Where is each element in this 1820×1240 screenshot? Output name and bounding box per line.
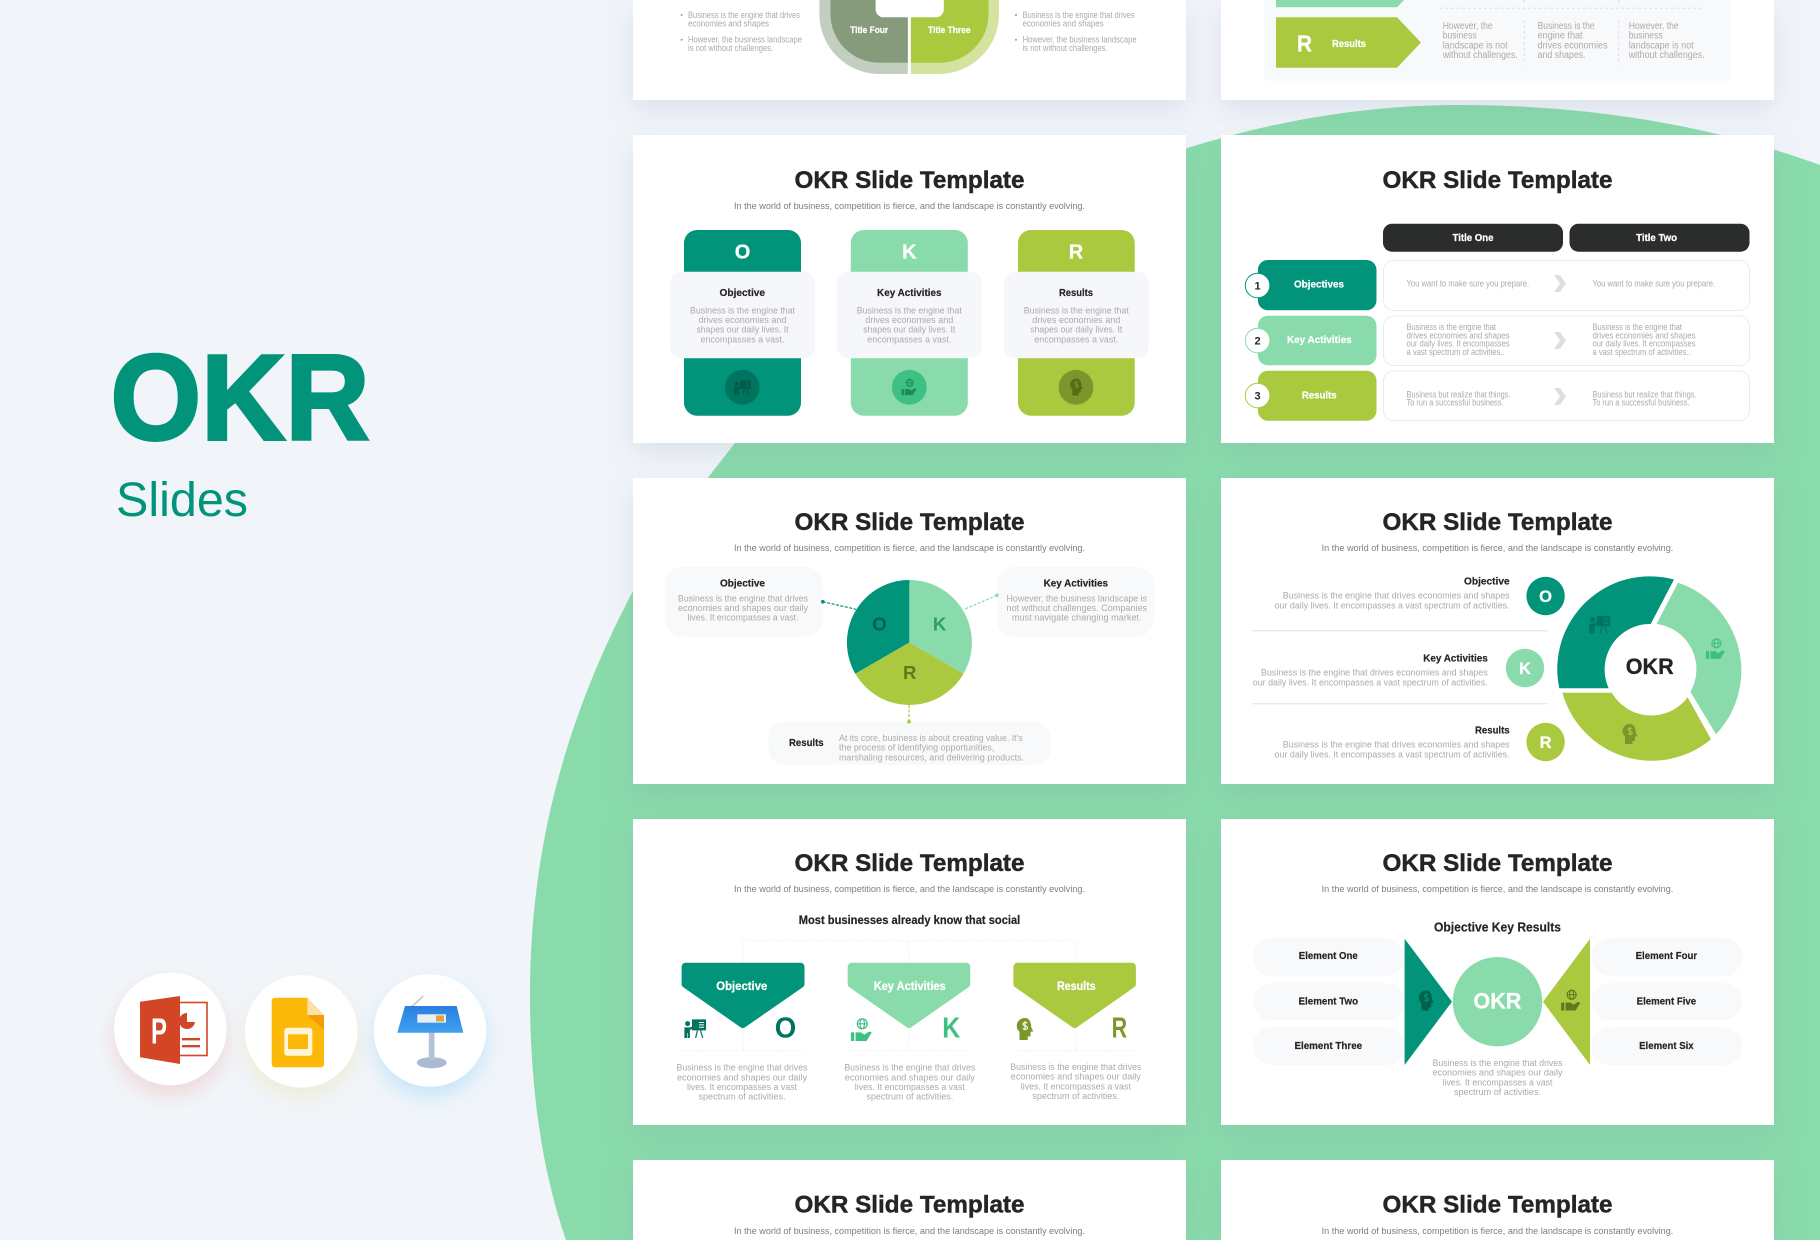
row 2: Key Activities: a vast spectrum of activities..	[1406, 347, 1504, 357]
left elements	[1253, 938, 1405, 1065]
column: Results: Results	[1059, 287, 1093, 299]
semicircular chart: Title Four	[850, 25, 888, 36]
row 2: Key Activities: our daily lives. It encompasses	[1406, 339, 1510, 349]
pie chart: O	[872, 614, 887, 635]
right triangle with icon	[1543, 939, 1590, 1065]
body bullets left: However, the business landscape	[688, 35, 802, 45]
column: Key Activities: K	[942, 1012, 960, 1044]
column: Objective: lives. It encompasses a vast	[687, 1082, 798, 1092]
body bullets right: is not without challenges.	[1023, 43, 1108, 53]
body text	[1432, 1058, 1563, 1097]
slide subtitle: In the world of business, competition is fierce, and the landscape is constantly evolving.	[734, 1226, 1085, 1237]
column: Objective: O	[775, 1012, 796, 1044]
column: Results: drives economies and	[1032, 315, 1120, 325]
callout: Results: Results	[789, 737, 824, 749]
slide title: OKR Slide Template	[794, 509, 1024, 536]
right elements: Element Four	[1636, 950, 1697, 962]
pie chart	[847, 580, 972, 705]
column: Results: encompasses a vast.	[1034, 334, 1118, 344]
column: Objective	[676, 967, 808, 1102]
item: Key Activities: our daily lives. It encompasses a vast spectrum of activities.	[1253, 677, 1488, 687]
row 1: Objectives: Objectives	[1294, 279, 1344, 291]
table header: Title Two: Title Two	[1636, 232, 1677, 244]
column: Key Activities	[844, 967, 976, 1102]
table header: Title One: Title One	[1452, 232, 1494, 244]
column: Key Activities: Key Activities	[874, 979, 946, 993]
body bullets right: Business is the engine that drives	[1023, 10, 1135, 20]
column: Objective: Objective	[716, 979, 768, 993]
row 1: Objectives: 1	[1255, 280, 1261, 292]
row 3: Results: Business but realize that things.	[1406, 389, 1510, 399]
column: Objective: spectrum of activities.	[698, 1092, 786, 1102]
slide subtitle: In the world of business, competition is fierce, and the landscape is constantly evolving.	[1322, 884, 1673, 895]
column: Key Activities: spectrum of activities.	[866, 1092, 953, 1102]
slide title: OKR Slide Template	[794, 850, 1024, 877]
icon: Google Slides	[245, 975, 358, 1088]
results table text	[1442, 21, 1705, 61]
column: Objective: encompasses a vast.	[700, 334, 784, 344]
results table text: However, the	[1629, 21, 1679, 32]
callout: Key Activities: not without challenges. Companies	[1007, 603, 1148, 613]
results table text: Business is the	[1538, 21, 1595, 32]
row 2: Key Activities: a vast spectrum of activities..	[1592, 347, 1690, 357]
item: Objective: our daily lives. It encompasses a vast spectrum of activities.	[1275, 600, 1510, 610]
panel: bottom-left partial slide	[633, 1160, 1186, 1240]
callout: Key Activities: must navigate changing market.	[1012, 613, 1142, 623]
results table text: without challenges.	[1442, 50, 1518, 61]
column: Key Activities: K	[902, 242, 917, 264]
slide title: OKR Slide Template	[1382, 850, 1612, 877]
row 2: Key Activities: Business is the engine that	[1406, 322, 1496, 332]
donut chart	[1557, 576, 1741, 761]
row 3: Results: Business but realize that things.	[1592, 389, 1696, 399]
slide title: OKR Slide Template	[794, 1192, 1024, 1218]
callout: Results: At its core, business is about creating value. It's	[839, 733, 1023, 743]
body bullets right: economies and shapes	[1023, 18, 1104, 28]
callout: Key Activities: Key Activities	[1044, 578, 1108, 590]
column: Results: Business is the engine that drives	[1010, 1062, 1142, 1072]
column: Objective: drives economies and	[698, 315, 787, 325]
row 2: Key Activities	[1245, 316, 1750, 366]
column: Objective	[670, 230, 815, 416]
body bullets right	[1015, 10, 1137, 53]
semicircular chart	[819, 0, 999, 74]
row 2: Key Activities: Business is the engine that	[1592, 322, 1682, 332]
row 1: Objectives	[1245, 260, 1750, 310]
left elements: Element Two	[1299, 995, 1358, 1007]
slide title: OKR Slide Template	[1382, 167, 1612, 194]
column: Key Activities: Key Activities	[877, 287, 942, 299]
column: Results	[1010, 967, 1142, 1101]
results table text: engine that	[1538, 31, 1583, 42]
column: Results: Results	[1057, 979, 1096, 993]
panel: slide with pentagons	[633, 819, 1186, 1125]
item: Objective: O	[1539, 588, 1552, 606]
column: Key Activities: Business is the engine that	[857, 305, 962, 315]
callout: Results: marshaling resources, and delivering products.	[839, 752, 1024, 762]
row 3: Results: To run a successful business.	[1406, 398, 1504, 408]
column: Objective: O	[735, 242, 750, 264]
item: Results: our daily lives. It encompasses a vast spectrum of activities.	[1275, 750, 1510, 760]
column: Key Activities: economies and shapes our daily	[845, 1072, 975, 1082]
body bullets left	[681, 10, 802, 53]
panel: bottom-right partial slide	[1221, 1160, 1774, 1240]
results table text: business	[1629, 31, 1663, 42]
slide title: OKR Slide Template	[1382, 1192, 1612, 1218]
column: Key Activities: lives. It encompasses a vast	[855, 1082, 965, 1092]
row 2: Key Activities: drives economies and shapes	[1592, 330, 1696, 340]
slide title: OKR Slide Template	[1382, 509, 1612, 536]
section heading: Most businesses already know that social	[799, 915, 1020, 927]
column: Results: R	[1069, 242, 1084, 264]
panel: top-right partial slide	[1221, 0, 1774, 100]
item: Objective	[1275, 576, 1565, 615]
results table text: landscape is not	[1443, 40, 1508, 51]
callout: Objective	[665, 567, 823, 637]
column: Key Activities: drives economies and	[865, 315, 953, 325]
column: Results: R	[1112, 1012, 1127, 1044]
row 1: Objectives: You want to make sure you prepare.	[1406, 279, 1529, 289]
arrow: results	[1276, 17, 1421, 68]
callout: Objective: lives. It encompasses a vast.	[688, 613, 798, 623]
item: Key Activities	[1253, 649, 1544, 687]
results table text: drives economies	[1538, 40, 1608, 51]
item: Results	[1275, 723, 1565, 761]
arrow: results: R	[1297, 31, 1312, 57]
subtitle: Slides: Slides	[116, 474, 248, 527]
row 2: Key Activities: 2	[1255, 336, 1261, 348]
slide subtitle: In the world of business, competition is fierce, and the landscape is constantly evolving.	[1322, 1226, 1673, 1237]
column: Objective: shapes our daily lives. It	[696, 325, 789, 335]
panel: top-left partial slide	[633, 0, 1186, 100]
column: Objective: Business is the engine that	[690, 305, 796, 315]
body text: economies and shapes our daily	[1432, 1068, 1563, 1078]
callout: Results: the process of identifying opportunities,	[839, 743, 994, 753]
body text: Business is the engine that drives	[1432, 1058, 1563, 1068]
column: Key Activities: Business is the engine that drives	[844, 1063, 976, 1073]
slide subtitle: In the world of business, competition is fierce, and the landscape is constantly evolving.	[734, 543, 1085, 554]
item: Objective: Objective	[1464, 576, 1510, 588]
pie chart: K	[933, 614, 947, 635]
results table text: business	[1443, 31, 1477, 42]
callout: Key Activities	[997, 567, 1154, 637]
icon: PowerPoint	[114, 973, 227, 1085]
left triangle with icon	[1405, 939, 1452, 1065]
icon: Keynote	[374, 974, 486, 1087]
item: Key Activities: Key Activities	[1423, 652, 1488, 664]
results table text: and shapes.	[1538, 50, 1586, 61]
row 2: Key Activities: drives economies and shapes	[1406, 330, 1510, 340]
column: Results: economies and shapes our daily	[1011, 1072, 1141, 1082]
results table text: without challenges.	[1628, 50, 1705, 61]
connector: Results	[907, 705, 911, 724]
item: Key Activities: K	[1519, 660, 1531, 678]
row 3: Results: 3	[1255, 390, 1261, 402]
row 2: Key Activities: our daily lives. It encompasses	[1592, 339, 1696, 349]
panel: slide with pie chart	[633, 478, 1186, 784]
column: Objective: Business is the engine that drives	[676, 1063, 808, 1073]
column: Results: lives. It encompasses a vast	[1021, 1081, 1131, 1091]
body bullets left: economies and shapes	[688, 18, 770, 28]
section heading: Objective Key Results	[1434, 920, 1561, 935]
body bullets left: is not without challenges.	[688, 43, 773, 53]
connector: Key Activities	[964, 594, 999, 609]
row 3: Results: Results	[1302, 389, 1337, 401]
panel: slide with OKR column cards	[633, 135, 1186, 443]
item: Results: Business is the engine that drives economies and shapes	[1283, 740, 1510, 750]
connector: Objective	[821, 600, 856, 609]
donut chart: OKR	[1626, 654, 1674, 679]
row 2: Key Activities: Key Activities	[1287, 334, 1352, 346]
column: Objective: economies and shapes our daily	[677, 1072, 808, 1082]
callout: Objective: economies and shapes our daily	[678, 603, 809, 613]
callout: Objective: Objective	[720, 578, 765, 590]
results table text: However, the	[1443, 21, 1493, 32]
panel: slide with table	[1221, 135, 1774, 443]
semicircular chart: Title Three	[928, 25, 971, 36]
column: Objective: Objective	[720, 287, 765, 299]
callout: Objective: Business is the engine that drives	[678, 593, 809, 603]
column: Results: spectrum of activities.	[1032, 1091, 1119, 1101]
callout: Key Activities: However, the business landscape is	[1007, 593, 1148, 603]
callout: Results	[768, 722, 1050, 765]
item: Results: Results	[1475, 724, 1510, 736]
slide subtitle: In the world of business, competition is fierce, and the landscape is constantly evolving.	[734, 884, 1085, 895]
left elements: Element One	[1299, 950, 1358, 962]
row 1: Objectives: You want to make sure you prepare.	[1592, 279, 1715, 289]
column: Key Activities: shapes our daily lives. It	[863, 325, 956, 335]
center OKR circle: OKR	[1473, 988, 1522, 1013]
slide title: OKR Slide Template	[794, 167, 1024, 194]
column: Key Activities: encompasses a vast.	[867, 334, 951, 344]
results table text: landscape is not	[1629, 40, 1694, 51]
center OKR circle	[1453, 957, 1542, 1046]
table header: Title One	[1383, 224, 1563, 252]
column: Results: Business is the engine that	[1024, 305, 1129, 315]
arrow: key activities partial	[1276, 0, 1404, 7]
column: Results	[1004, 230, 1148, 416]
title: OKR: OKR	[110, 330, 370, 466]
body text: lives. It encompasses a vast	[1442, 1077, 1553, 1087]
body bullets left: Business is the engine that drives	[688, 10, 801, 20]
item: Objective: Business is the engine that drives economies and shapes	[1283, 591, 1510, 601]
panel: slide with donut chart	[1221, 478, 1774, 784]
body bullets right: However, the business landscape	[1023, 35, 1137, 45]
panel: slide with six elements	[1221, 819, 1774, 1125]
slide subtitle: In the world of business, competition is fierce, and the landscape is constantly evolving.	[734, 201, 1085, 212]
pie chart: R	[903, 662, 917, 683]
right elements	[1591, 938, 1742, 1065]
table header: Title Two	[1570, 224, 1750, 252]
arrow: results: Results	[1332, 39, 1366, 50]
item: Key Activities: Business is the engine that drives economies and shapes	[1261, 667, 1488, 677]
body text: spectrum of activities.	[1454, 1087, 1541, 1097]
column: Results: shapes our daily lives. It	[1030, 325, 1123, 335]
right elements: Element Six	[1639, 1040, 1694, 1052]
item: Results: R	[1540, 734, 1552, 752]
mint background blob	[530, 105, 1820, 1240]
icon: PowerPoint: P	[151, 1010, 167, 1051]
column: Key Activities	[837, 230, 982, 416]
left elements: Element Three	[1294, 1040, 1362, 1052]
right elements: Element Five	[1637, 995, 1696, 1007]
row 3: Results	[1245, 371, 1750, 421]
row 3: Results: To run a successful business.	[1592, 398, 1690, 408]
slide subtitle: In the world of business, competition is fierce, and the landscape is constantly evolving.	[1322, 543, 1673, 554]
